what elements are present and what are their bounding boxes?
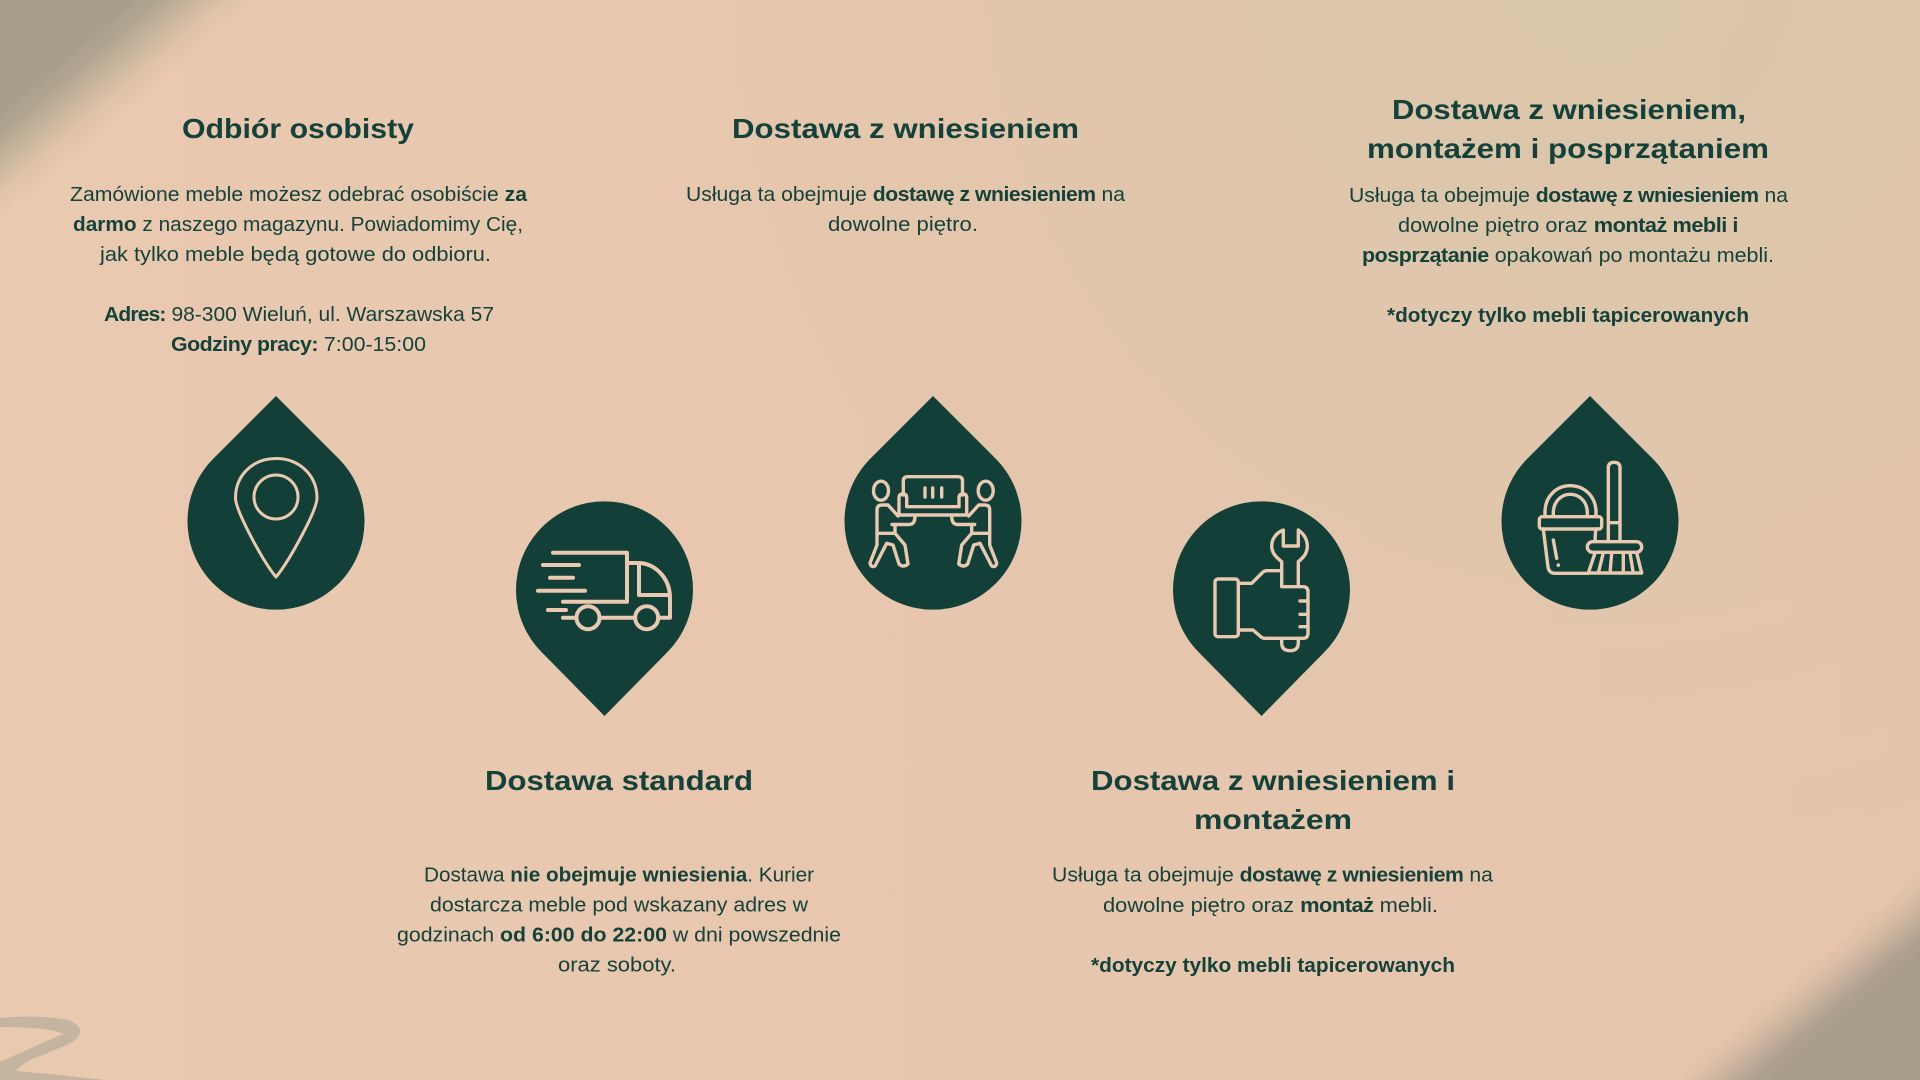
heading [1091,765,1455,835]
panel: Odbiór osobisty [70,113,528,610]
panel: Dostawa z wniesieniem [686,113,1126,610]
text block: Usługa ta obejmuje dostawę z wniesieniem na [1349,184,1789,207]
heading: Odbiór osobisty [182,113,415,144]
heading: montażem [1194,804,1352,835]
text block: Adres: 98-300 Wieluń, ul. Warszawska 57 [104,303,494,326]
text block: Zamówione meble możesz odebrać osobiście za [70,183,528,206]
text block: Usługa ta obejmuje dostawę z wniesieniem na [686,183,1126,206]
text block: oraz soboty. [558,954,676,976]
icon: movers carrying sofa drop [845,396,1022,610]
text block: jak tylko meble będą gotowe do odbioru. [99,243,491,266]
heading: Dostawa standard [485,765,753,796]
panel: Dostawa z wniesieniem, montażem i posprzątaniem [1349,94,1789,610]
text block: dostarcza meble pod wskazany adres w [430,894,808,916]
icon: hand holding wrench drop [1173,501,1350,716]
text block: dowolne piętro oraz montaż mebli i [1398,214,1738,237]
text block: posprzątanie opakowań po montażu mebli. [1362,244,1774,267]
text block [397,864,841,976]
text block: darmo z naszego magazynu. Powiadomimy Cię, [73,213,523,236]
heading: montażem i posprzątaniem [1367,133,1769,164]
text block [686,183,1126,236]
heading: Dostawa z wniesieniem i [1091,765,1455,796]
heading: Dostawa z wniesieniem [732,113,1079,144]
text block: Usługa ta obejmuje dostawę z wniesieniem na [1052,864,1494,886]
text block: Godziny pracy: 7:00-15:00 [171,333,426,356]
text block: *dotyczy tylko mebli tapicerowanych [1387,304,1749,327]
heading: Dostawa z wniesieniem, [1392,94,1746,125]
text block [70,183,528,356]
icon: location pin drop [188,396,365,610]
panel: Dostawa standard [397,501,841,976]
text block [1052,864,1494,977]
text block: godzinach od 6:00 do 22:00 w dni powszednie [397,924,841,946]
text block: *dotyczy tylko mebli tapicerowanych [1091,954,1455,977]
heading [1367,94,1769,164]
text block: dowolne piętro oraz montaż mebli. [1103,894,1438,917]
text block: dowolne piętro. [828,213,978,236]
panel: Dostawa z wniesieniem i montażem [1052,501,1494,977]
text block [1349,184,1789,327]
text block: Dostawa nie obejmuje wniesienia. Kurier [424,864,814,886]
icon: delivery truck drop [516,501,693,716]
icon: bucket and broom drop [1502,396,1679,610]
